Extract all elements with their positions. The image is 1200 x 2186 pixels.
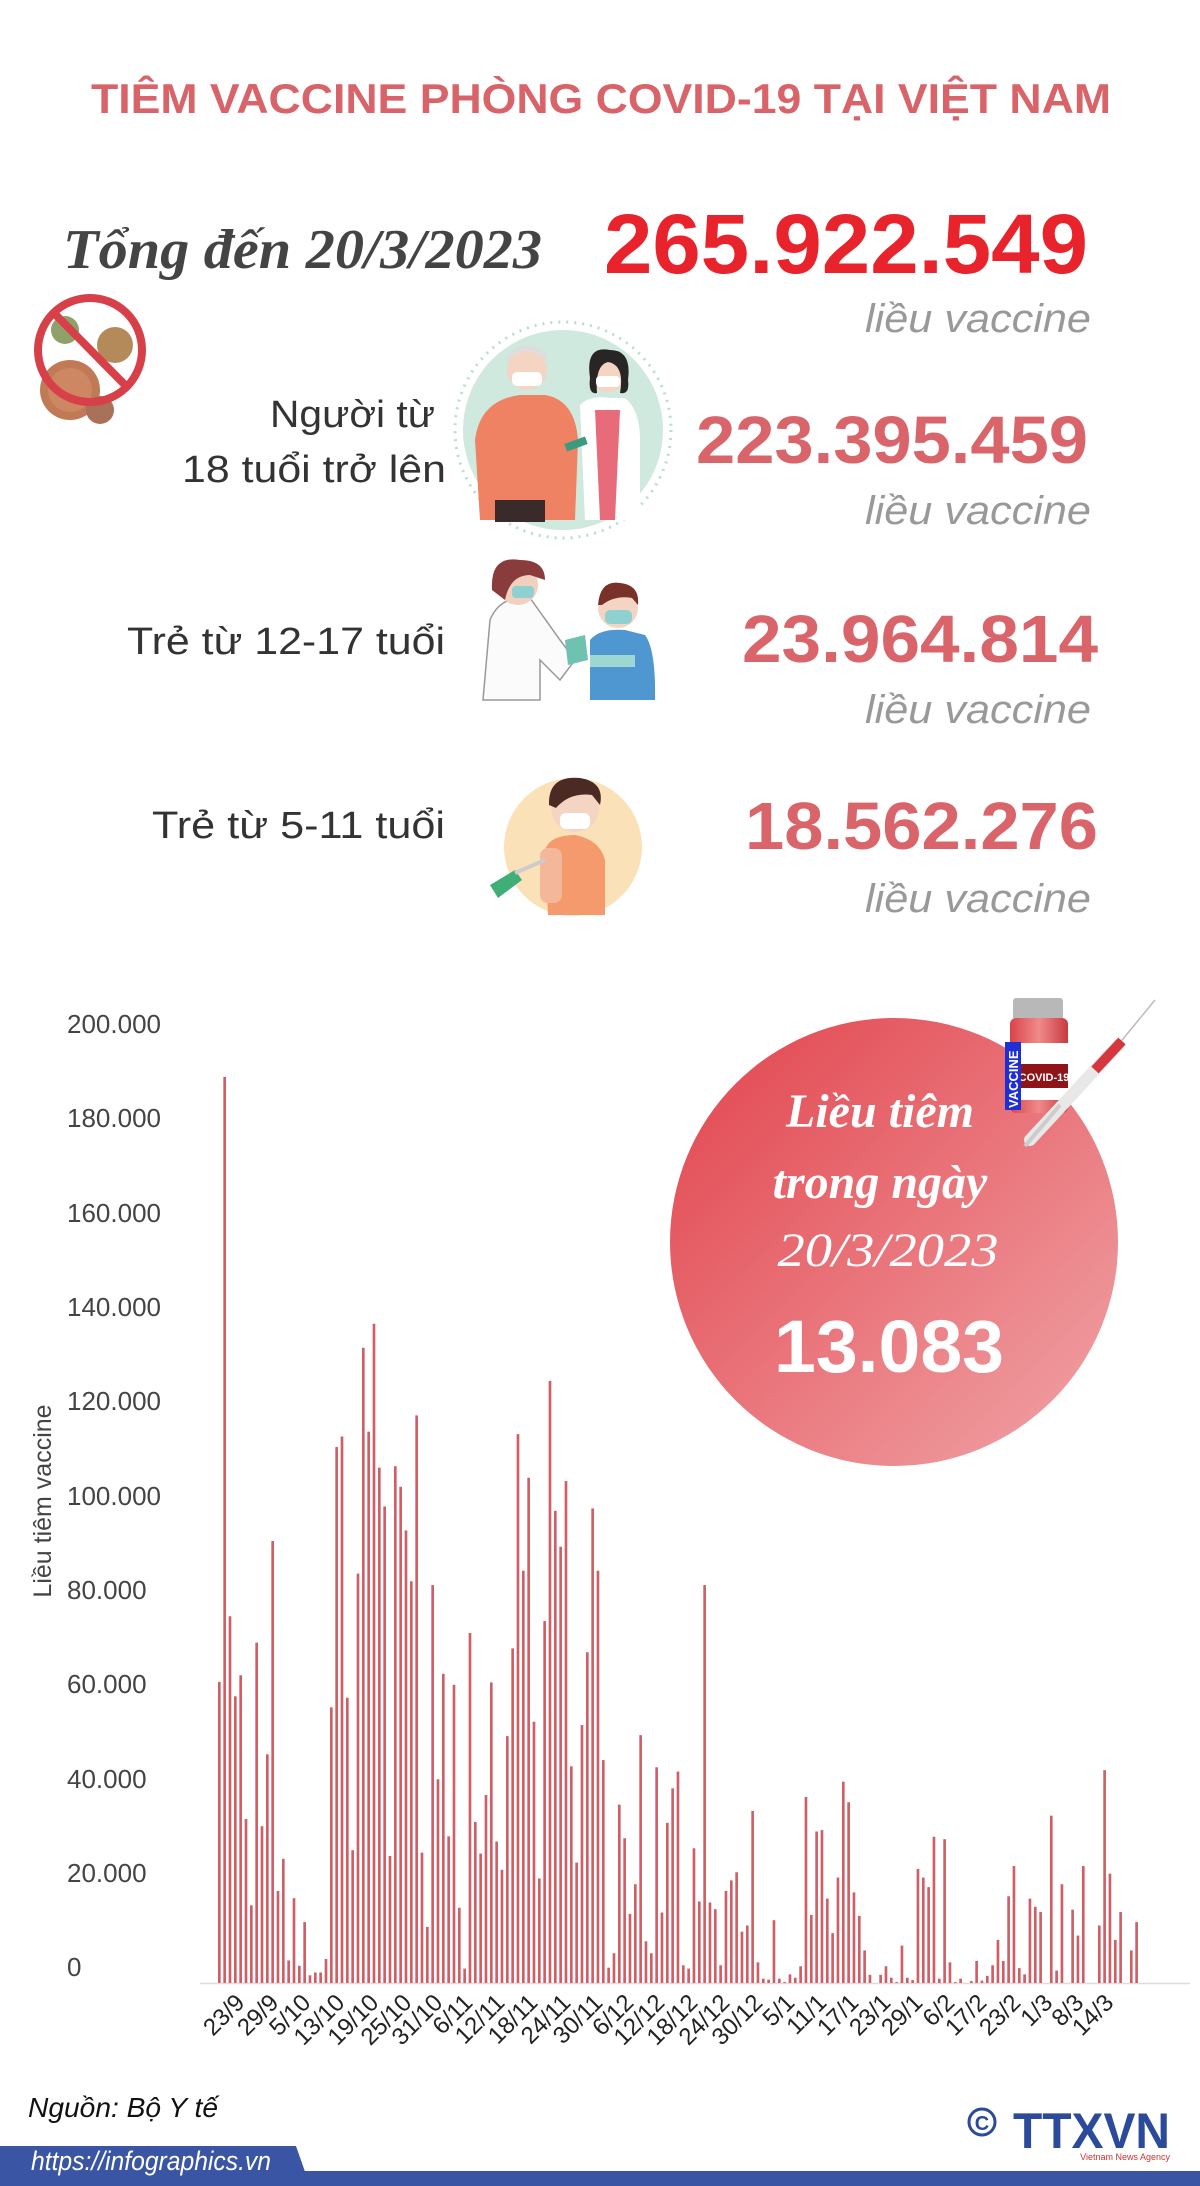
x-axis date labels: 29/1 [876, 1989, 928, 2041]
row: adults label [182, 394, 446, 491]
x-axis date labels: 17/2 [940, 1989, 992, 2041]
teen number: 23.964.814 [742, 602, 1098, 677]
y-axis labels: 180.000 [67, 1103, 161, 1133]
x-axis date labels: 1/3 [1016, 1989, 1058, 2032]
adults number: liều vaccine [865, 489, 1091, 533]
y-axis labels [67, 1009, 161, 1982]
x-axis date labels: 18/11 [483, 1989, 543, 2049]
total number [604, 197, 1091, 341]
x-axis date labels: 6/2 [918, 1989, 960, 2032]
x-axis date labels: 30/11 [548, 1989, 608, 2049]
illustration: child vaccinated [490, 778, 642, 916]
y-axis labels: 0 [67, 1952, 81, 1982]
kids number: liều vaccine [865, 877, 1091, 921]
x-axis date labels: 29/9 [232, 1989, 284, 2041]
title: TIÊM VACCINE PHÒNG COVID-19 TẠI VIỆT NAM [91, 74, 1111, 122]
row: adults label: Người từ [270, 394, 435, 436]
bar chart: daily doses [29, 1009, 1190, 2051]
icon: vaccine vial and syringe [1005, 998, 1155, 1146]
row: 5-11 label: Trẻ từ 5-11 tuổi [152, 805, 445, 847]
row: 12-17 label: Trẻ từ 12-17 tuổi [127, 621, 445, 663]
y-axis labels: 120.000 [67, 1386, 161, 1416]
x-axis date labels: 24/12 [674, 1989, 735, 2051]
bars [218, 1077, 1138, 1983]
icon: virus prohibited [38, 298, 142, 424]
x-axis date labels: 12/11 [450, 1989, 510, 2049]
illustration: elderly man and doctor [455, 322, 671, 538]
teen number: liều vaccine [865, 688, 1091, 732]
y-axis labels: 200.000 [67, 1009, 161, 1039]
y-axis labels: 20.000 [67, 1858, 147, 1888]
callout: daily doses circle: trong ngày [773, 1156, 988, 1209]
x-axis date labels: 12/12 [609, 1989, 670, 2051]
y-axis labels: 140.000 [67, 1292, 161, 1322]
total label: Tổng đến 20/3/2023 [63, 219, 542, 281]
logo: TTXVN: Vietnam News Agency [1080, 2152, 1170, 2162]
kids number [745, 789, 1098, 921]
x-axis date labels: 5/1 [758, 1989, 800, 2032]
x-axis date labels: 23/1 [844, 1989, 896, 2041]
y-axis labels: 40.000 [67, 1764, 147, 1794]
callout: daily doses circle: 20/3/2023 [778, 1224, 998, 1277]
adults number [696, 403, 1091, 533]
x-axis date labels: 5/10 [264, 1989, 316, 2041]
icon: vaccine vial and syringe: VACCINE [1006, 1050, 1021, 1108]
y-axis labels: 60.000 [67, 1669, 147, 1699]
y-axis labels: 160.000 [67, 1198, 161, 1228]
x-axis date labels: 13/10 [289, 1989, 350, 2051]
total number: liều vaccine [865, 297, 1091, 341]
x-axis date labels: 23/9 [198, 1989, 250, 2041]
callout: daily doses circle: Liều tiêm [785, 1085, 974, 1138]
x-axis date labels: 30/12 [707, 1989, 768, 2051]
x-axis date labels: 23/2 [974, 1989, 1026, 2041]
x-axis date labels: 6/12 [587, 1989, 639, 2041]
teen number [742, 602, 1098, 732]
x-axis date labels: 6/11 [427, 1989, 478, 2040]
callout: daily doses circle: 13.083 [774, 1305, 1004, 1388]
source note: Nguồn: Bộ Y tế [28, 2092, 220, 2123]
x-axis date labels: 17/1 [812, 1989, 864, 2041]
x-axis date labels: 25/10 [356, 1989, 417, 2051]
row: adults label: 18 tuổi trở lên [182, 449, 446, 491]
y-axis labels: 80.000 [67, 1575, 147, 1605]
x-axis date labels: 19/10 [323, 1989, 384, 2051]
kids number: 18.562.276 [745, 789, 1098, 864]
illustration: nurse and teen [483, 559, 655, 700]
footer bar [0, 2146, 1200, 2186]
adults number: 223.395.459 [696, 403, 1088, 478]
x-axis date labels: 14/3 [1067, 1989, 1119, 2041]
footer bar: https://infographics.vn [31, 2146, 271, 2176]
x-axis date labels: 8/3 [1047, 1989, 1089, 2032]
total number: 265.922.549 [604, 197, 1088, 291]
x-axis date labels [198, 1989, 1119, 2051]
y-axis title: Liều tiêm vaccine [29, 1404, 57, 1598]
logo: TTXVN: TTXVN [1013, 2103, 1170, 2159]
x-axis date labels: 31/10 [387, 1989, 448, 2051]
icon: vaccine vial and syringe: COVID-19 [1019, 1072, 1069, 1084]
x-axis date labels: 11/1 [781, 1989, 832, 2040]
x-axis date labels: 24/11 [516, 1989, 576, 2049]
logo: TTXVN: C [975, 2113, 989, 2135]
callout: daily doses circle [670, 1018, 1118, 1466]
y-axis labels: 100.000 [67, 1481, 161, 1511]
x-axis date labels: 18/12 [642, 1989, 703, 2051]
